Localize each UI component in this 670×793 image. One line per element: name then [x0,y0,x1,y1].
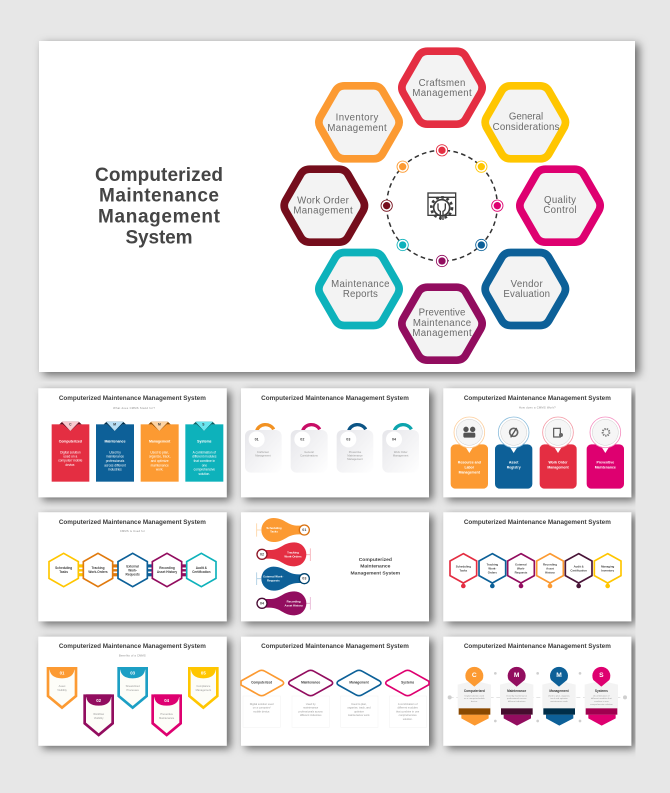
hexagon: Recording Asset History [152,553,182,587]
card 03 [337,425,373,473]
hexagon: Recording Asset History: Recording [159,566,175,570]
item 04 Recording Asset History: Recording [287,599,301,603]
hexagon: Preventive Maintenance Management [402,287,482,360]
panel: thumbnail 2, numbered cards [241,388,429,497]
item 02 Tracking Work-Orders: Work-Orders [284,554,302,558]
hexagon: External Work-Requests: Work- [517,567,525,571]
hexagon: Vendor Evaluation [485,252,565,325]
panel: thumbnail 8, diamonds [241,637,429,746]
shield 03 Streamlined Processes [119,667,147,708]
card 04: Work Order [394,450,408,454]
column: Maintenance: professionals across [507,697,526,700]
title: Management [98,206,221,228]
column: Management: maintenance work [550,700,569,703]
hexagon: Tracking Work-Orders: Work- [488,567,496,571]
heading: Computerized Maintenance Management System [464,519,611,526]
card: Maintenance [96,422,134,482]
column: Systems: comprehensive [399,713,417,717]
heading: Computerized Maintenance Management System [464,395,611,402]
hexagon: Scheduling Tasks [49,553,78,587]
card: Resource and Labor Management [451,417,488,489]
shield 03 Streamlined Processes: 03 [130,670,136,675]
item 01 Scheduling Tasks: 01 [302,528,306,532]
card: Computerized: Digital solution [60,450,81,454]
hexagon: Preventive Maintenance Management: Maintenance [413,318,471,329]
title: Maintenance [99,186,219,206]
card: Management: M [158,423,161,427]
card: Management: Used to plan, [150,450,169,454]
title: System [126,228,192,248]
column: Management [337,670,381,727]
column: Maintenance: different industries [508,700,525,703]
card: Maintenance: professionals [106,459,125,463]
column: Systems: A combination of [398,702,418,706]
card: Work Order Management: Work Order [548,461,568,465]
item 01 Scheduling Tasks: Scheduling [266,526,282,530]
card: Management: Management [149,439,171,443]
panel: thumbnail 7, benefits of a CMMS [38,637,227,746]
card: Computerized: device. [65,463,75,467]
hexagon: External Work-Requests: Work- [128,568,137,572]
column: Systems: comprehensive solution [590,703,613,706]
shield 02 Workflow Visibility: Workflow [93,712,104,716]
card 03: 03 [346,437,350,441]
card: Work Order Management: Management [547,466,569,470]
column: Computerized: mobile device. [253,709,270,713]
card: Systems: solution. [198,472,210,476]
card: Resource and Labor Management: Labor [464,466,475,470]
shield 05 Compliance Management: Compliance [196,684,211,688]
column: Systems [585,667,618,726]
hexagon: Audit and Certification: Audit & [196,566,208,570]
card: Computerized: C [69,423,72,427]
hexagon: Scheduling Tasks: Tasks [459,569,468,573]
shield 02 Workflow Visibility: 02 [96,698,102,703]
hexagon: Audit and Certification: Certification [570,569,587,573]
card: Management: maintenance [151,463,169,467]
column: Management: maintenance work. [348,713,370,717]
hexagon: Vendor Evaluation: Evaluation [503,289,550,300]
card: Systems: different modules [192,455,217,459]
hexagon: Work Order Management: Management [293,205,353,216]
hexagon: Recording Asset History [537,554,563,588]
column: Computerized: Computerized [251,681,272,685]
shield 05 Compliance Management [189,667,217,708]
card 04 [382,425,419,473]
item 02 Tracking Work-Orders: Tracking [287,550,299,554]
hexagon: External Work-Requests: Requests [126,572,140,576]
hexagon: Work Order Management: Work Order [297,195,350,206]
card 03: Management [347,457,363,461]
shield 01 Asset Visibility [48,667,76,708]
hexagon: Audit and Certification: Audit & [574,565,584,569]
column: Systems: Systems [401,681,414,685]
column: Systems: S [599,672,604,679]
column: Management: Used to plan, [351,702,367,706]
shield 01 Asset Visibility: Asset [59,684,66,688]
item 01 Scheduling Tasks [257,518,309,542]
heading: Computerized Maintenance Management System [59,395,206,402]
hexagon: Managing Inventory: Inventory [601,569,614,573]
column: Management: M [556,672,562,679]
hexagon: Audit and Certification [187,553,216,587]
card: Asset Registry [495,417,532,489]
card: Maintenance: industries [108,468,122,472]
hexagon: General Considerations: General [509,111,543,122]
shield 02 Workflow Visibility [85,694,113,735]
hexagon: Scheduling Tasks [450,554,477,588]
hexagon: Recording Asset History: Asset [546,567,554,571]
hexagon: External Work-Requests: Requests [515,571,528,575]
item 03 External Work-Requests [257,567,309,591]
hexagon: External Work-Requests: External [126,564,139,568]
hexagon: Audit and Certification: Certification [192,570,211,574]
column: Computerized: C [472,672,477,679]
icon: browser window with gear and wrench [428,193,456,220]
hexagon: Managing Inventory: Managing [601,565,615,569]
subheading: What does CMMS Stand for? [113,406,155,410]
hexagon: Inventory Management: Inventory [336,112,379,123]
shield 04 Preventive Maintenance: Preventive [160,712,173,716]
card: Management: and optimize [151,459,169,463]
dashed ring with nodes [381,145,503,267]
hexagon: Audit and Certification [565,554,592,588]
card 01: Craftsmen [257,450,270,454]
column: Management: organize, track, and [347,705,371,709]
heading: Computerized Maintenance Management System [59,519,206,526]
card 01: 01 [255,437,259,441]
card: Systems: one [202,463,207,467]
hexagon ring diagram [284,51,600,360]
side heading: Management System [351,570,401,576]
hexagon: Tracking Work-Orders: Tracking [487,563,498,567]
side heading [351,557,401,576]
hexagon: Work Order Management [284,169,364,242]
hexagon: General Considerations: Considerations [493,122,560,133]
heading: Computerized Maintenance Management System [59,643,206,650]
column: Systems: A combination of [593,694,610,697]
card 03: Preventive [349,450,362,454]
card: Systems: S [202,423,205,427]
card: Computerized: Computerized [59,439,82,443]
shield 03 Streamlined Processes: Streamlined [126,684,140,688]
hexagon: Craftsmen Management: Management [412,88,472,99]
column: Maintenance: maintenance [303,705,319,709]
column: Systems: Systems [595,689,608,693]
column: Systems: combine in one [594,701,609,703]
hexagon: External Work-Requests: External [515,563,527,567]
card: Work Order Management [540,417,577,489]
card 02 [291,425,328,473]
title [95,165,223,248]
column: Maintenance: Used by maintenance [506,694,528,697]
card 04: Management [393,453,409,457]
hexagon: Scheduling Tasks: Scheduling [55,566,72,570]
hexagon: Recording Asset History: Recording [543,563,557,567]
card: Computerized [52,422,89,482]
hexagon: Tracking Work-Orders: Tracking [92,566,105,570]
column: Maintenance: Maintenance [301,681,320,685]
card: Management: work. [156,468,164,472]
hexagon: Vendor Evaluation: Vendor [511,279,543,290]
column: Management [542,667,576,726]
item 03 External Work-Requests: 03 [302,577,306,581]
side heading: Maintenance [360,564,391,570]
shield 03 Streamlined Processes: Processes [126,688,140,692]
side heading: Computerized [359,557,392,563]
column: Management: Management [549,689,570,693]
hexagon: Maintenance Reports: Maintenance [331,279,389,290]
hexagon: Scheduling Tasks: Tasks [59,570,68,574]
shield 01 Asset Visibility: Visibility [57,688,67,692]
card: Systems: A combination of [193,450,216,454]
card: Systems: comprehensive [194,468,215,472]
hexagon: Quality Control [520,169,600,242]
column: Computerized [458,667,491,726]
hexagon: Tracking Work-Orders [479,554,506,588]
card: Management: organize, track, [149,455,171,459]
hexagon: Scheduling Tasks: Scheduling [456,565,471,569]
item 04 Recording Asset History: Asset History [285,603,303,607]
card: Systems: Systems [197,439,212,443]
hexagon: External Work-Requests [508,554,534,588]
column: Maintenance [289,670,333,727]
shield 05 Compliance Management: Management [196,688,211,692]
shield 04 Preventive Maintenance: 04 [164,698,170,703]
shield 01 Asset Visibility: 01 [60,670,65,675]
card: Preventive Maintenance: Maintenance [595,466,616,470]
hexagon: Craftsmen Management [402,51,482,124]
card: Systems [185,422,223,482]
heading: Computerized Maintenance Management System [464,643,611,650]
card 02: Considerations [300,453,319,457]
connectors [77,564,188,576]
hexagon: Maintenance Reports [319,252,399,325]
column: Systems [386,670,429,727]
item 03 External Work-Requests: Requests [267,579,280,583]
column: Maintenance: professionals across [299,709,323,713]
card 02: 02 [300,437,304,441]
column: Computerized: Digital solution used [250,702,274,706]
title: Computerized [95,165,223,186]
panel: thumbnail 3, how does a CMMS work [443,388,631,497]
column: Systems: that combine in one [396,709,420,713]
card: Maintenance: M [113,423,116,427]
heading: Computerized Maintenance Management System [261,395,409,402]
card: Management [141,422,179,482]
hexagon: General Considerations [485,86,565,159]
card 03: Maintenance [347,453,363,457]
card: Computerized: used on a [63,454,78,458]
card: Maintenance: maintenance [106,455,124,459]
card 01: Management [255,453,271,457]
column: Computerized: device. [471,701,478,703]
column: Maintenance: different industries [300,713,322,717]
item 02 Tracking Work-Orders [257,542,310,566]
item 02 Tracking Work-Orders: 02 [260,552,264,556]
shield 05 Compliance Management: 05 [201,670,206,675]
item 01 Scheduling Tasks: Tasks [270,530,278,534]
card: Preventive Maintenance: Preventive [597,461,614,465]
subheading: Benefits of a CMMS [119,653,146,657]
hexagon: Inventory Management: Management [327,123,387,134]
hexagon: Maintenance Reports: Reports [343,289,378,300]
column: Maintenance [500,667,533,726]
hexagon: Preventive Maintenance Management: Preventive [419,307,465,318]
hexagon: Tracking Work-Orders: Orders [488,571,497,575]
column: Management: optimize [354,709,364,713]
hexagon: Managing Inventory [594,554,621,588]
subheading: How does a CMMS Work? [519,405,556,409]
column: Computerized: Digital solution used [465,694,485,697]
panel: main slide [39,41,635,372]
panel: thumbnail 9, lettered pins [443,637,631,746]
card: Preventive Maintenance [587,417,624,489]
shield 04 Preventive Maintenance [153,694,181,735]
hexagon: Recording Asset History: History [545,571,555,575]
column: Computerized: Computerized [464,689,485,693]
heading: Computerized Maintenance Management System [261,643,409,650]
card 01 [245,425,282,473]
card 02: General [304,450,314,454]
column: Maintenance: Maintenance [507,689,526,693]
column: Management: Used to plan, organize, [548,694,570,697]
card: Maintenance: Maintenance [104,439,126,443]
hexagon: External Work-Requests [118,553,147,587]
shield 02 Workflow Visibility: Visibility [94,716,104,720]
hexagon: Tracking Work-Orders: Work-Orders [88,570,108,574]
hexagon: Inventory Management [319,86,399,159]
column: Computerized: on a computer/ [253,705,271,709]
column: Computerized [241,670,284,727]
card: Asset Registry: Asset [509,461,519,465]
column: Management: Management [349,681,370,685]
card: Computerized: computer/ mobile [58,458,83,462]
column: Maintenance: M [514,672,520,679]
panel: thumbnail 1, what does CMMS stand for [38,388,227,497]
column: Maintenance: Used by [306,702,316,706]
card: Asset Registry: Registry [507,466,521,470]
column: Systems: different modules [398,705,419,709]
hexagon: Tracking Work-Orders [83,553,113,587]
column: Systems: solution. [403,717,413,721]
timeline line and dots [448,672,627,722]
hexagon: Recording Asset History: Asset History [157,570,177,574]
hexagon: Quality Control: Control [543,205,577,216]
hexagon: Preventive Maintenance Management: Management [412,328,472,339]
hexagon: Craftsmen Management: Craftsmen [419,78,465,89]
panel: thumbnail 4, CMMS is used for [38,512,227,621]
subheading: CMMS is Used for [120,529,145,533]
item 03 External Work-Requests: External Work- [263,575,283,579]
column: Management: track and optimize [550,697,569,700]
column: Systems: different modules that [591,697,612,700]
shield 04 Preventive Maintenance: Maintenance [159,716,175,720]
card 04: 04 [392,437,397,441]
card: Resource and Labor Management: Resource and [458,461,481,465]
panel: thumbnail 6, six hexagons with pins [443,512,631,621]
panel: thumbnail 5, blob list [241,512,429,621]
card: Resource and Labor Management: Management [459,471,481,475]
hexagon: Quality Control: Quality [544,195,576,206]
item 04 Recording Asset History: 04 [260,601,265,605]
column: Computerized: on a computer/mobile [464,697,485,700]
card: Systems: that combine in [194,459,215,463]
card: Maintenance: across different [104,463,126,467]
card: Maintenance: Used by [109,450,121,454]
item 04 Recording Asset History [257,591,310,615]
